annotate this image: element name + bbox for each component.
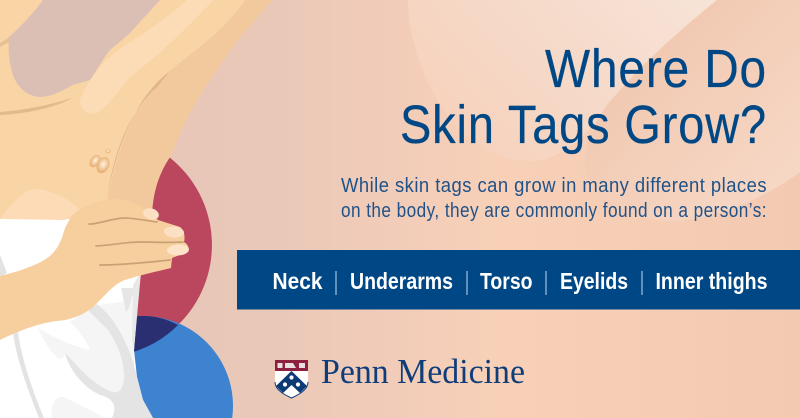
underarm crease [107, 71, 170, 198]
icon: shield [275, 360, 308, 398]
cloth fold: small [121, 288, 134, 312]
body locations bar: Underarms [350, 268, 453, 294]
white cloth [0, 219, 153, 418]
title [400, 39, 767, 155]
intro text: While skin tags can grow in many different places [341, 175, 767, 197]
hand and forearm [0, 199, 189, 340]
shadow behind arm [9, 0, 160, 97]
body locations bar: Neck [272, 268, 323, 294]
body locations bar: Inner thighs [656, 268, 768, 294]
finger creases [89, 218, 183, 265]
light skin above cloth [0, 189, 80, 220]
head crease [0, 37, 9, 47]
cloth fold: main shadow [65, 304, 153, 418]
blue circle [125, 316, 233, 418]
red circle [125, 157, 212, 345]
title: Where Do [545, 39, 767, 99]
logo: Penn Medicine [275, 352, 525, 398]
body locations bar: Torso [480, 268, 532, 294]
body locations bar [237, 250, 800, 310]
body locations bar: Eyelids [560, 268, 628, 294]
figure: torso and arm [0, 0, 272, 330]
cloth fold: soft highlight [38, 300, 134, 400]
fingernails [142, 207, 160, 221]
upper arm crease [0, 98, 72, 115]
cloth fold: lower [52, 397, 105, 418]
arm highlight [80, 0, 213, 114]
cloth fold: right strip [132, 272, 141, 350]
intro text [341, 175, 767, 222]
icon: skin tag [87, 149, 112, 175]
cloth fold: upper left [0, 255, 7, 277]
underarm shading [108, 0, 272, 212]
circle overlap [130, 316, 178, 353]
cloth fold: left line [13, 332, 44, 418]
wordmark: Penn Medicine [321, 352, 525, 391]
